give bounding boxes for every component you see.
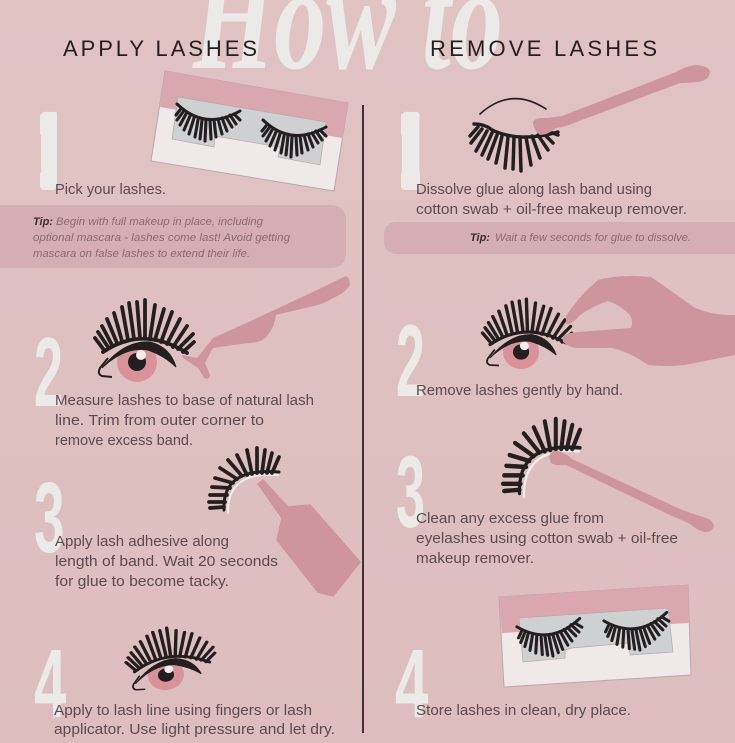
icon: false lash bbox=[209, 448, 279, 513]
heading: apply lashes: APPLY LASHES bbox=[63, 36, 257, 61]
center divider bbox=[362, 105, 364, 733]
step 4 text: Apply to lash line using fingers or lash bbox=[54, 702, 312, 719]
tip box bbox=[384, 222, 735, 254]
step 3 text: makeup remover. bbox=[416, 550, 534, 567]
icon: hand bbox=[562, 276, 735, 366]
step 2 number: 2 bbox=[396, 305, 425, 419]
step 1 text bbox=[416, 181, 687, 218]
step 4 number: 4 bbox=[34, 630, 67, 738]
step 2 text: Measure lashes to base of natural lash bbox=[55, 392, 314, 409]
step 3 text bbox=[55, 533, 278, 590]
tip box: Wait a few seconds for glue to dissolve. bbox=[495, 232, 691, 244]
tip box bbox=[0, 205, 346, 268]
panel: apply lashes bbox=[0, 71, 360, 738]
heading: remove lashes: REMOVE LASHES bbox=[430, 36, 657, 61]
icon: glue bottle bbox=[258, 480, 360, 596]
icon: eye with applied lashes bbox=[122, 622, 219, 695]
icon: eye with lashes bbox=[481, 298, 573, 370]
step 4 number: 4 bbox=[395, 630, 428, 739]
step 2 text: Remove lashes gently by hand. bbox=[416, 382, 623, 399]
step 3 text: eyelashes using cotton swab + oil-free bbox=[416, 530, 678, 547]
panel: remove lashes bbox=[384, 65, 735, 739]
step 3 text: Clean any excess glue from bbox=[416, 510, 604, 527]
step 4 text: applicator. Use light pressure and let dry. bbox=[54, 721, 335, 738]
icon: cotton swab bbox=[549, 451, 714, 532]
step 4 text bbox=[54, 702, 335, 738]
step 1 text: Dissolve glue along lash band using bbox=[416, 181, 652, 198]
tip box: mascara on false lashes to extend their life. bbox=[33, 248, 250, 260]
tip box: Tip: bbox=[470, 232, 490, 244]
tip box: Tip: bbox=[33, 216, 53, 228]
tip box: Begin with full makeup in place, including bbox=[56, 216, 264, 228]
step 2 number: 2 bbox=[34, 317, 63, 427]
step 1 number: 1 bbox=[25, 93, 70, 209]
step 2 text: remove excess band. bbox=[55, 432, 193, 449]
step 3 text bbox=[416, 510, 678, 567]
step 3 text: length of band. Wait 20 seconds bbox=[55, 553, 278, 570]
step 1 text: Pick your lashes. bbox=[55, 181, 166, 198]
step 3 text: for glue to become tacky. bbox=[55, 573, 229, 590]
icon: lash applicator bbox=[182, 276, 350, 379]
icon: eye with lashes bbox=[95, 300, 194, 382]
step 1 number: 1 bbox=[385, 94, 432, 210]
step 1 text: cotton swab + oil-free makeup remover. bbox=[416, 201, 687, 218]
icon: lash card bbox=[151, 71, 348, 191]
step 2 text bbox=[55, 392, 314, 449]
tip box: optional mascara - lashes come last! Avoid getting bbox=[33, 232, 291, 244]
icon: false lash bbox=[503, 419, 580, 497]
icon: cotton swab bbox=[533, 65, 710, 135]
icon: lash card bbox=[499, 585, 691, 687]
step 3 number: 3 bbox=[396, 436, 425, 550]
icon: closed eye with lashes bbox=[470, 99, 558, 171]
step 2 text: line. Trim from outer corner to bbox=[55, 412, 264, 429]
step 3 number: 3 bbox=[34, 463, 65, 574]
step 4 text: Store lashes in clean, dry place. bbox=[416, 702, 631, 719]
step 3 text: Apply lash adhesive along bbox=[55, 533, 229, 550]
